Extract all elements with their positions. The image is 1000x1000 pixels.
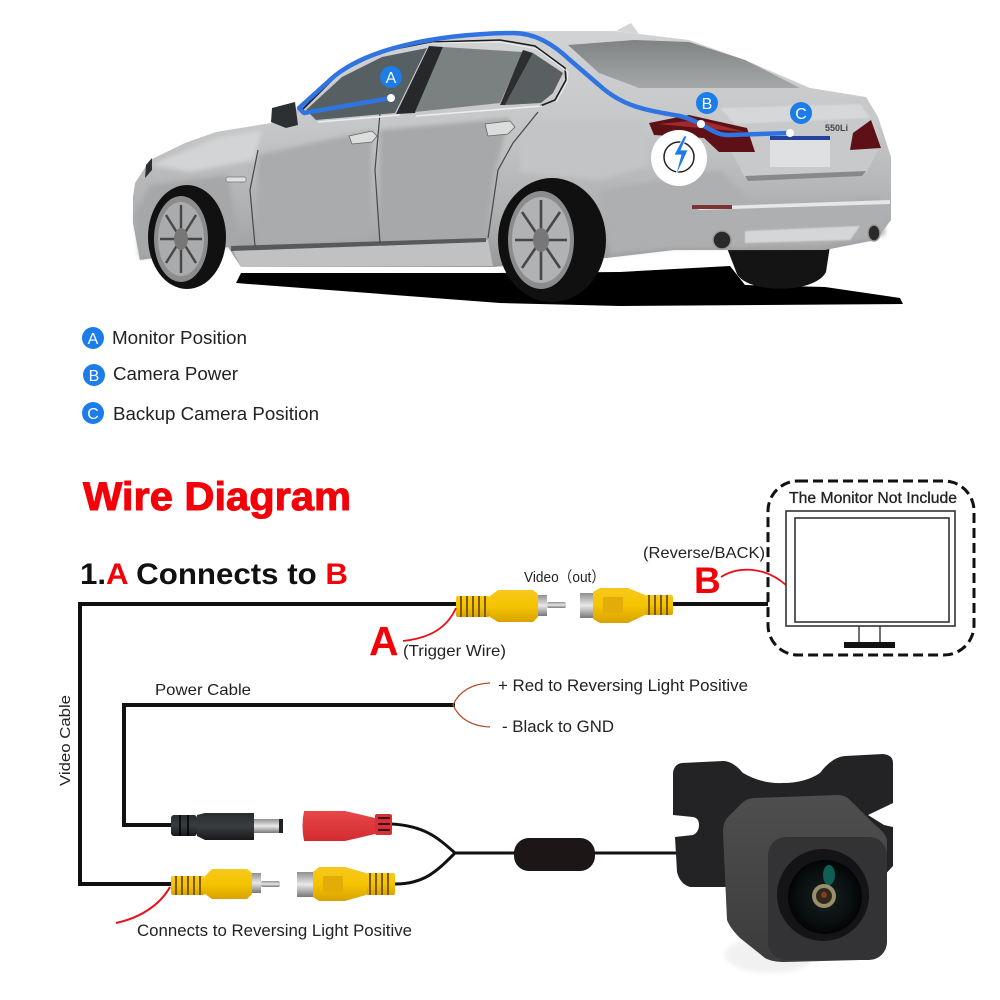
headlight [145, 158, 152, 178]
label: power cable: Power Cable [155, 682, 251, 699]
video cable wire [80, 604, 456, 884]
Y cable [392, 824, 680, 884]
marker C [786, 102, 812, 137]
female RCA connector top [580, 588, 673, 623]
red leader line [116, 887, 170, 923]
subheading: A connects to B: 1.A Connects to B [80, 558, 348, 591]
label: red to reversing light: + Red to Reversing Light Positive [498, 676, 748, 695]
marker B [696, 92, 718, 128]
marker A: A [386, 70, 397, 87]
legend item A: Monitor Position [112, 328, 247, 348]
marker B: B [702, 96, 712, 113]
legend item B: B [89, 368, 99, 385]
wire to monitor [673, 602, 768, 606]
camera face [768, 837, 887, 960]
label: trigger wire: (Trigger Wire) [403, 643, 506, 660]
door handles [349, 121, 515, 144]
trunk panel [694, 97, 880, 178]
mirror [271, 102, 298, 128]
monitor panel [768, 481, 974, 655]
antenna [616, 23, 639, 34]
car illustration [133, 23, 903, 306]
callout A [369, 608, 456, 664]
monitor note: The Monitor Not Include [789, 490, 957, 507]
heading: wire diagram: Wire Diagram [83, 475, 351, 519]
rear quarter window [505, 53, 563, 105]
floor shadow [725, 937, 815, 973]
rear wheel rim [508, 191, 574, 289]
center pillar [396, 46, 443, 114]
wire split [453, 683, 490, 727]
fender badge [226, 177, 246, 182]
ground shadow [236, 266, 903, 306]
legend item A: A [88, 331, 99, 348]
monitor stand [859, 626, 880, 642]
rear window [568, 40, 800, 88]
trunk lower shadow [745, 171, 866, 181]
lens [777, 849, 869, 941]
camera housing [723, 795, 887, 962]
trunk band [720, 104, 870, 124]
front wheel rim [154, 196, 208, 282]
dashed boundary [768, 481, 974, 655]
lower male RCA [171, 869, 280, 899]
label: video out: Video（out） [524, 569, 605, 586]
monitor frame [786, 511, 955, 626]
label: black to GND: - Black to GND [502, 717, 614, 736]
window trim [300, 40, 566, 112]
rear tyre [498, 178, 606, 302]
callout A: A [369, 618, 399, 664]
legend item C: C [87, 406, 99, 423]
lower female RCA [297, 867, 395, 901]
bumper trim [692, 200, 890, 210]
license plate [770, 140, 830, 167]
front tyre [148, 185, 226, 289]
inline module [514, 838, 595, 871]
blue route line [299, 33, 790, 135]
far rear tyre [727, 246, 830, 289]
label: connects to reversing light: Connects to Reversing Light Positive [137, 921, 412, 940]
badge: 550Li [825, 123, 848, 133]
label: video cable: Video Cable [57, 695, 74, 786]
callout B: B [694, 560, 721, 601]
lower sill [231, 240, 493, 267]
legend item C: Backup Camera Position [113, 404, 319, 424]
car body [133, 31, 891, 267]
marker A [380, 66, 402, 102]
marker C: C [795, 106, 807, 123]
body shading [135, 102, 885, 258]
left taillight [649, 115, 755, 152]
power cable wire [124, 705, 455, 825]
right taillight [850, 120, 881, 150]
male RCA connector top [456, 590, 566, 622]
rear window pillar strip [500, 50, 533, 105]
black DC plug [171, 813, 283, 840]
door seams [250, 112, 538, 246]
red DC socket [302, 811, 392, 841]
camera [673, 754, 893, 973]
callout B [694, 560, 786, 601]
mounting bracket [673, 754, 893, 887]
icon: power bolt [651, 130, 707, 186]
legend [82, 327, 319, 424]
label: reverse/back: (Reverse/BACK) [643, 545, 765, 562]
exhausts [713, 231, 731, 249]
legend item B: Camera Power [113, 364, 238, 384]
front side window [306, 48, 427, 120]
middle side window [415, 47, 523, 112]
